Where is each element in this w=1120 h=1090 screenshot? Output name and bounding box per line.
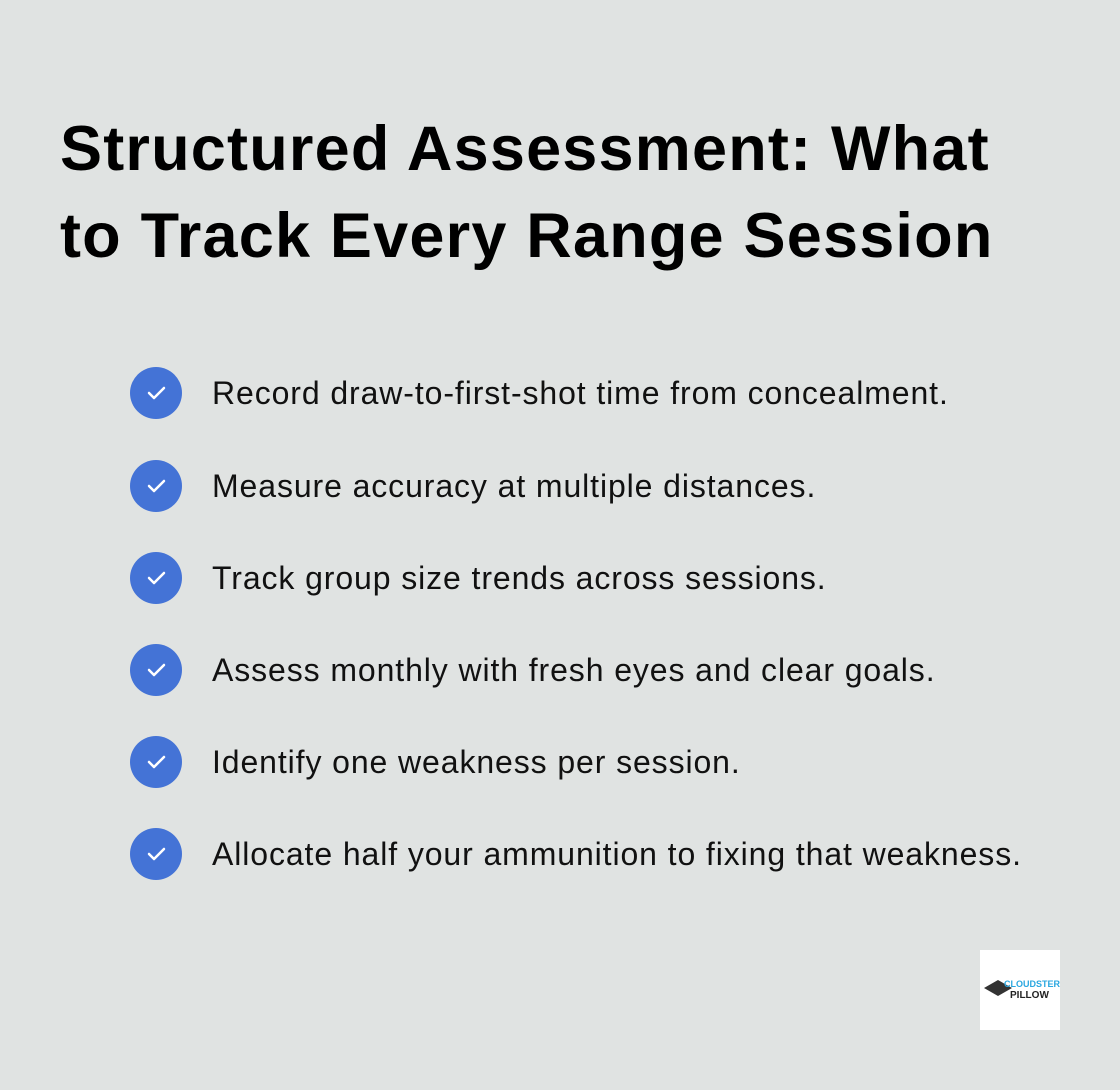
logo: CLOUDSTER [1004, 979, 1060, 989]
checklist item 6: Allocate half your ammunition to fixing that weakness. [212, 836, 1022, 872]
title: to Track Every Range Session [60, 201, 994, 271]
checklist item 2 [130, 460, 816, 512]
checklist item 2: Measure accuracy at multiple distances. [212, 468, 816, 504]
checklist item 1 [130, 367, 949, 419]
title [60, 114, 994, 271]
checklist item 3: Track group size trends across sessions. [212, 560, 827, 596]
checklist item 5 [130, 736, 741, 788]
title: Structured Assessment: What [60, 114, 990, 184]
logo: PILLOW [1010, 990, 1049, 1001]
checklist item 3 [130, 552, 827, 604]
checklist item 6 [130, 828, 1022, 880]
checklist item 4 [130, 644, 936, 696]
checklist item 5: Identify one weakness per session. [212, 744, 741, 780]
checklist item 1: Record draw-to-first-shot time from concealment. [212, 375, 949, 411]
checklist item 4: Assess monthly with fresh eyes and clear goals. [212, 652, 936, 688]
logo [980, 950, 1060, 1030]
